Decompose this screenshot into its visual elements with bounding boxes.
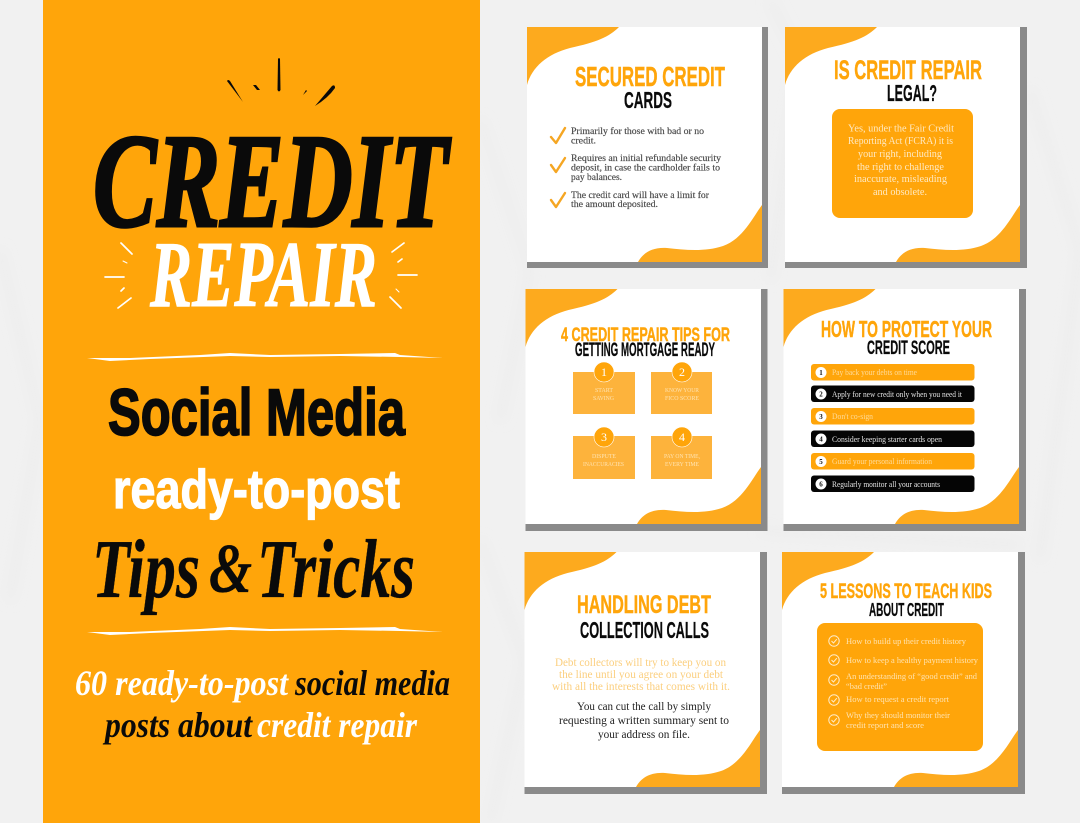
step 4 (811, 430, 974, 447)
panel: secured credit cards (527, 27, 768, 268)
answer box: your right, including (858, 149, 942, 160)
lessons text: “bad credit” (846, 681, 887, 691)
tip 2: 2 (679, 365, 685, 379)
tip 3: DISPUTE (592, 453, 616, 460)
heading: Tips and Tricks: Tricks (257, 523, 415, 616)
checklist text: deposit, in case the cardholder fails to (571, 163, 720, 174)
answer box: the right to challenge (857, 162, 945, 173)
tagline: social media (294, 663, 450, 703)
panel: handling debt collection calls (524, 552, 767, 794)
icons: check marks (551, 128, 565, 207)
step 3: Don't co-sign (832, 412, 873, 421)
intro text: Debt collectors will try to keep you on (555, 657, 726, 669)
heading: 4 CREDIT REPAIR TIPS FOR (561, 325, 730, 346)
step 4: 4 (819, 436, 823, 444)
title: REPAIR: REPAIR (149, 223, 377, 327)
step 5: Guard your personal information (832, 457, 932, 466)
title: CREDIT: CREDIT (93, 107, 452, 255)
panel: orange cover (43, 0, 480, 823)
advice text (559, 701, 729, 741)
subheading: ABOUT CREDIT (869, 600, 944, 620)
subheading: COLLECTION CALLS (580, 617, 709, 643)
lessons box (817, 623, 983, 751)
checklist text: The credit card will have a limit for (571, 190, 710, 201)
answer box: inaccurate, misleading (854, 174, 947, 185)
step 2: Apply for new credit only when you need it (832, 390, 963, 399)
tip 2 (651, 362, 712, 414)
subheading: CREDIT SCORE (867, 338, 950, 359)
step 1 (811, 364, 974, 380)
answer box (832, 109, 973, 218)
tagline: posts about (102, 705, 253, 745)
tip 4 (651, 427, 712, 479)
answer box: Yes, under the Fair Credit (848, 124, 954, 135)
heading: Tips and Tricks: & (209, 531, 252, 608)
step 1: Pay back your debts on time (832, 368, 917, 377)
tagline: credit repair (257, 705, 418, 745)
step 4: Consider keeping starter cards open (832, 435, 942, 444)
tip 1 (573, 362, 635, 414)
step 2: 2 (819, 390, 823, 398)
intro text: the line until you agree on your debt (559, 669, 724, 681)
panel: five lessons to teach kids (782, 552, 1025, 794)
step 6: Regularly monitor all your accounts (832, 480, 940, 489)
lessons text: How to build up their credit history (846, 636, 967, 646)
tip 3 (573, 427, 635, 479)
subheading: GETTING MORTGAGE READY (575, 340, 715, 361)
answer box: Reporting Act (FCRA) it is (848, 136, 953, 147)
heading: HANDLING DEBT (577, 591, 711, 619)
advice text: requesting a written summary sent to (559, 715, 729, 727)
divider: bottom brush line (87, 627, 443, 635)
tip 2: FICO SCORE (665, 395, 699, 402)
icons: check circles (829, 636, 839, 725)
heading: Tips and Tricks (92, 523, 415, 616)
step 3: 3 (819, 413, 823, 421)
step 2 (811, 386, 974, 402)
heading: IS CREDIT REPAIR (834, 55, 982, 85)
answer box: and obsolete. (873, 187, 927, 198)
checklist text: Requires an initial refundable security (571, 153, 721, 164)
step 1: 1 (819, 369, 823, 377)
step 3 (811, 408, 974, 424)
icon: white burst rays (105, 243, 417, 308)
tip 4: EVERY TIME (665, 461, 699, 468)
checklist text: the amount deposited. (571, 200, 658, 210)
divider: top brush line (87, 353, 443, 361)
heading: ready-to-post: ready-to-post (113, 458, 400, 520)
heading: SECURED CREDIT (575, 61, 725, 92)
lessons text: How to request a credit report (846, 694, 950, 704)
lessons text: Why they should monitor their (846, 710, 950, 720)
tagline (75, 663, 450, 745)
tip 1: SAVING (593, 395, 614, 402)
subheading: LEGAL? (887, 80, 937, 106)
checklist text: Primarily for those with bad or no (571, 126, 704, 137)
step 5: 5 (819, 458, 823, 466)
checklist text (571, 126, 721, 210)
intro text: with all the interests that comes with it. (552, 681, 730, 693)
tip 4: PAY ON TIME, (664, 453, 700, 460)
lessons text: How to keep a healthy payment history (846, 655, 979, 665)
subheading: CARDS (624, 87, 672, 113)
panel: protect your credit score (784, 289, 1026, 531)
tip 3: 3 (601, 430, 607, 444)
advice text: You can cut the call by simply (577, 701, 711, 713)
tip 1: START (595, 387, 613, 394)
tip 2: KNOW YOUR (665, 387, 700, 394)
icon: black burst rays (227, 58, 335, 106)
checklist text: pay balances. (571, 173, 622, 183)
advice text: your address on file. (598, 729, 690, 741)
step 6 (811, 476, 974, 492)
tagline: 60 ready-to-post (75, 663, 289, 703)
tip 3: INACCURACIES (583, 461, 624, 468)
intro text (552, 657, 730, 693)
lessons text: An understanding of “good credit” and (846, 671, 978, 681)
panel: mortgage ready tips (526, 289, 768, 531)
panel: is credit repair legal (785, 27, 1027, 268)
checklist text: credit. (571, 136, 596, 146)
tip 1: 1 (601, 365, 607, 379)
lessons text (846, 636, 979, 730)
tip 4: 4 (679, 430, 685, 444)
step 6: 6 (819, 480, 823, 488)
heading: Social Media: Social Media (108, 375, 406, 449)
lessons text: credit report and score (846, 720, 924, 730)
heading: Tips and Tricks: Tips (92, 523, 200, 616)
step 5 (811, 453, 974, 470)
